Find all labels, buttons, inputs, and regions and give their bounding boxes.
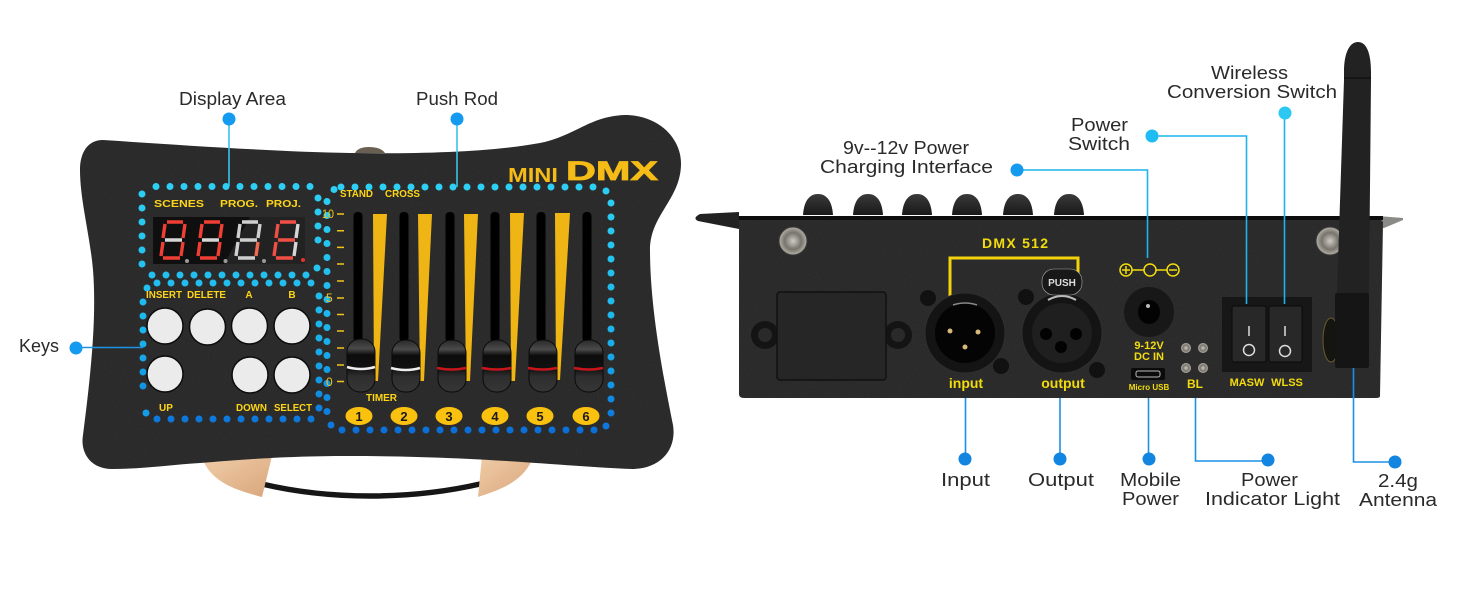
callout: mobile power: Power	[1122, 489, 1179, 509]
polarity symbol	[1120, 264, 1179, 276]
callout: output: Output	[1028, 470, 1094, 490]
rear view: connector panel	[695, 42, 1403, 398]
DC power jack: 9-12V	[1134, 340, 1164, 352]
fader scale: 0	[326, 375, 333, 389]
mounting flanges	[695, 212, 1403, 229]
callout: output	[1028, 398, 1094, 490]
callout: input: Input	[941, 470, 990, 490]
rocker switches: MASW	[1230, 377, 1265, 389]
callout: keys	[19, 336, 143, 356]
brand logo: MINI DMX: DMX	[566, 156, 658, 186]
XLR input connector	[920, 290, 1009, 374]
panel top edge	[739, 216, 1383, 220]
fader labels: TIMER	[366, 393, 398, 404]
numbered channel badges: 1	[355, 409, 363, 424]
XLR output connector: PUSH	[1048, 278, 1076, 289]
callout: charging interface	[820, 138, 1148, 258]
callout: wireless conversion switch	[1167, 63, 1337, 304]
callout: push rod: Push Rod	[416, 89, 498, 109]
carrying handle	[203, 456, 532, 497]
DMX 512 label and bracket: DMX 512	[982, 235, 1048, 251]
brand logo: MINI DMX	[508, 156, 658, 187]
dotted frame: display area	[142, 186, 320, 275]
fader labels	[340, 189, 420, 404]
callout: 2.4g antenna	[1354, 368, 1438, 510]
push rod knobs	[347, 339, 603, 392]
yellow level wedges	[373, 213, 570, 381]
key labels: B	[288, 290, 296, 301]
corner screws	[779, 227, 1344, 255]
callout: power switch	[1068, 115, 1246, 304]
connector captions	[949, 375, 1085, 391]
callout: wireless conversion switch: Wireless	[1211, 63, 1288, 83]
DC power jack: DC IN	[1134, 351, 1164, 363]
numbered channel badges: 6	[582, 409, 590, 424]
numbered channel badges: 2	[400, 409, 408, 424]
callout: charging interface: 9v--12v Power	[843, 138, 969, 158]
seven-segment display	[153, 217, 305, 264]
top screw	[355, 147, 385, 153]
callout: power indicator light: Indicator Light	[1205, 489, 1340, 509]
key labels: INSERT	[146, 290, 182, 301]
antenna	[1335, 42, 1371, 368]
callout: wireless conversion switch: Conversion Switch	[1167, 82, 1337, 102]
key labels: DOWN	[236, 403, 267, 414]
key labels	[146, 290, 312, 414]
callout: 2.4g antenna: Antenna	[1359, 490, 1438, 510]
key labels: UP	[159, 403, 173, 414]
display area labels	[154, 199, 301, 210]
callout: mobile power	[1120, 398, 1181, 509]
XLR output connector	[1018, 269, 1105, 378]
numbered channel badges: 5	[536, 409, 544, 424]
callout: power switch: Power	[1071, 115, 1128, 135]
indicator LEDs: BL	[1187, 377, 1203, 391]
DC power jack	[1124, 287, 1174, 363]
indicator LEDs	[1181, 343, 1208, 391]
rocker switches	[1222, 297, 1312, 389]
display area labels: SCENES	[154, 199, 204, 210]
fader slots	[354, 212, 592, 342]
fader scale: 5	[326, 291, 333, 305]
front view: mini DMX controller	[80, 115, 681, 497]
dotted frame: keys	[142, 283, 320, 419]
callout: charging interface: Charging Interface	[820, 157, 993, 177]
antenna connector nut	[1323, 318, 1339, 362]
micro USB port: Micro USB	[1129, 383, 1169, 392]
numbered channel badges	[346, 407, 600, 425]
callout: display area: Display Area	[179, 89, 287, 109]
blanking plate	[751, 292, 912, 380]
connector captions: output	[1041, 375, 1085, 391]
rear panel body	[739, 217, 1383, 398]
DMX 512 label and bracket	[950, 235, 1078, 296]
callout: 2.4g antenna: 2.4g	[1378, 471, 1418, 491]
callout: input	[941, 398, 990, 490]
callout: power indicator light: Power	[1241, 470, 1298, 490]
key labels: SELECT	[274, 403, 312, 414]
numbered channel badges: 3	[445, 409, 453, 424]
callout: keys: Keys	[19, 336, 59, 356]
callout: power indicator light	[1196, 398, 1340, 509]
fader scale: 10	[322, 207, 334, 221]
rocker switches: WLSS	[1271, 377, 1303, 389]
fader knob tops	[803, 194, 1084, 215]
callout: power switch: Switch	[1068, 134, 1130, 154]
callouts	[19, 63, 1438, 510]
key labels: A	[245, 290, 253, 301]
display area labels: PROG.	[220, 199, 258, 210]
key buttons	[147, 308, 310, 393]
callout: push rod	[416, 89, 498, 187]
numbered channel badges: 4	[491, 409, 499, 424]
callout: display area	[179, 89, 287, 186]
fader scale	[322, 207, 344, 389]
key labels: DELETE	[187, 290, 226, 301]
brand logo: MINI DMX: MINI	[508, 165, 558, 187]
controller body	[80, 115, 681, 469]
fader labels: STAND	[340, 189, 373, 200]
connector captions: input	[949, 375, 983, 391]
display area labels: PROJ.	[266, 199, 301, 210]
callout: mobile power: Mobile	[1120, 470, 1181, 490]
dotted frame: push rods	[327, 186, 611, 430]
micro USB port	[1129, 368, 1169, 392]
fader labels: CROSS	[385, 189, 420, 200]
